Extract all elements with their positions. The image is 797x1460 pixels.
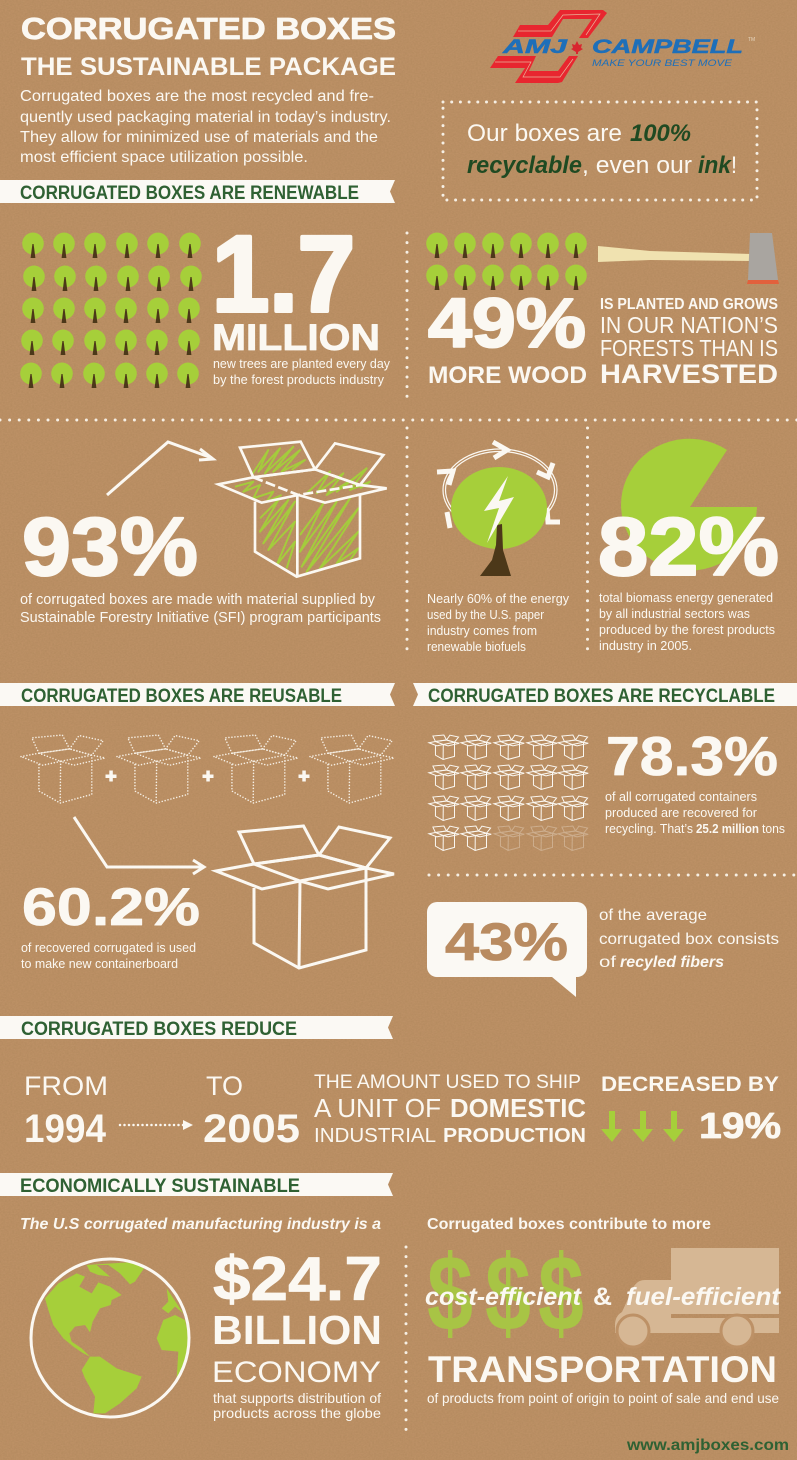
text: biofuels: renewable biofuels: [427, 640, 526, 654]
stat: 60.2%: 60.2%: [22, 878, 200, 937]
text: recycled fibers: of: [599, 954, 617, 971]
stat: 82%: produced by the forest products: [599, 623, 775, 637]
stat: 82%: total biomass energy generated: [599, 591, 773, 605]
title: [21, 11, 396, 81]
stat: 93%: 93%: [22, 500, 198, 593]
timeline: from 1994 to 2005: [24, 1071, 300, 1151]
stat: 78.3%: produced are recovered for: [605, 806, 757, 820]
icon: tree with energy cycle: [437, 442, 560, 576]
callout: 100% recyclable: 100%: [630, 120, 691, 147]
callout: 100% recyclable: Our boxes are: [467, 120, 622, 147]
callout: 100% recyclable: !: [731, 152, 737, 179]
banner: reduce: CORRUGATED BOXES REDUCE: [21, 1019, 297, 1040]
subheading: economy: The U.S corrugated manufacturing industry is a: [20, 1216, 381, 1233]
text: recycled fibers: [599, 907, 779, 971]
icon: dollar signs: $: [427, 1232, 473, 1353]
stat: cost-efficient and fuel-efficient transportation: &: [593, 1283, 612, 1311]
text: recycled fibers: corrugated box consists: [599, 931, 779, 948]
icon grid: 30 trees: [20, 232, 202, 388]
callout: 100% recyclable: recyclable: [467, 152, 582, 179]
stat: 82%: 82%: [598, 500, 779, 593]
statement: amount used to ship: PRODUCTION: [443, 1125, 586, 1147]
stat: 49% more wood: MORE WOOD: [428, 362, 587, 389]
website URL: www.amjboxes.com: [626, 1437, 789, 1454]
stat: $24.7 billion economy: that supports distribution of: [213, 1390, 381, 1406]
title: CORRUGATED BOXES: [21, 11, 396, 46]
stat: 1.7 million trees: new trees are planted every day: [213, 357, 391, 371]
icon: dollar signs: $: [485, 1232, 531, 1353]
stat: decreased by 19%: [601, 1073, 781, 1146]
timeline: from 1994 to 2005: 2005: [203, 1107, 300, 1151]
icon grid: 12 trees: [426, 232, 587, 290]
timeline: from 1994 to 2005: TO: [206, 1071, 243, 1101]
pie chart: 82%: [621, 439, 757, 571]
intro paragraph: quently used packaging material in today’s industry.: [20, 109, 391, 126]
stat: 60.2%: [21, 878, 200, 971]
logo: AMJ Campbell: MAKE YOUR BEST MOVE: [592, 58, 733, 69]
banner: renewable: CORRUGATED BOXES ARE RENEWABLE: [20, 183, 359, 204]
stat: 1.7 million trees: MILLION: [212, 317, 380, 358]
stat: cost-efficient and fuel-efficient transportation: fuel-efficient: [626, 1283, 782, 1311]
banner: reusable: CORRUGATED BOXES ARE REUSABLE: [21, 686, 342, 707]
icon: dollar signs: $: [538, 1232, 584, 1353]
statement: amount used to ship: DOMESTIC: [450, 1093, 586, 1123]
statement: amount used to ship: A UNIT OF: [314, 1093, 441, 1123]
callout: 100% recyclable: , even our: [582, 152, 692, 179]
icons: four dotted boxes with plus signs: [21, 735, 394, 803]
text: biofuels: Nearly 60% of the energy: [427, 592, 570, 606]
text: biofuels: industry comes from: [427, 624, 537, 638]
stat: decreased by 19%: 19%: [699, 1105, 781, 1146]
logo: AMJ Campbell: AMJ: [501, 37, 568, 58]
icon: axe: [598, 233, 779, 284]
stat: $24.7 billion economy: BILLION: [212, 1307, 382, 1353]
timeline: from 1994 to 2005: 1994: [24, 1107, 107, 1151]
stat: $24.7 billion economy: [212, 1245, 382, 1421]
stat: 1.7 million trees: by the forest products industry: [213, 373, 385, 387]
text: biofuels: [427, 592, 570, 654]
arrow: to shaded box: [107, 442, 213, 495]
text: recycled fibers: recyled fibers: [620, 954, 724, 971]
speech bubble: 43%: 43%: [445, 913, 568, 972]
stat: cost-efficient and fuel-efficient transportation: cost-efficient: [425, 1283, 583, 1311]
statement: amount used to ship: INDUSTRIAL: [314, 1125, 436, 1147]
intro paragraph: most efficient space utilization possible.: [20, 149, 308, 166]
intro paragraph: [20, 88, 391, 166]
stat: 93%: [20, 500, 381, 626]
icon: box with green scribble: [218, 442, 387, 577]
stat: 93%: Sustainable Forestry Initiative (SFI) program participants: [20, 609, 381, 626]
banner: economically sustainable: ECONOMICALLY SUSTAINABLE: [20, 1176, 300, 1197]
icon grid: 20 small boxes: [429, 735, 588, 850]
icon: dollar signs: [427, 1232, 584, 1353]
statement: amount used to ship: THE AMOUNT USED TO SHIP: [314, 1072, 581, 1093]
icon: truck: [615, 1248, 779, 1347]
stat: 49% more wood: 49%: [428, 284, 586, 362]
subheading: transportation: Corrugated boxes contribute to more: [427, 1216, 711, 1233]
banner: reduce: [0, 1016, 393, 1040]
stat: decreased by 19%: DECREASED BY: [601, 1073, 779, 1096]
callout: 100% recyclable: ink: [698, 152, 733, 179]
stat: $24.7 billion economy: $24.7: [213, 1245, 382, 1314]
stat: 49% more wood: IN OUR NATION’S: [600, 312, 778, 338]
stat: 49% more wood: [428, 284, 778, 389]
banner: economically sustainable: [0, 1173, 393, 1197]
stat: cost-efficient and fuel-efficient transportation: [425, 1283, 782, 1406]
title: THE SUSTAINABLE PACKAGE: [21, 53, 396, 81]
stat: cost-efficient and fuel-efficient transportation: TRANSPORTATION: [428, 1349, 777, 1390]
stat: 60.2%: to make new containerboard: [21, 957, 178, 971]
stat: 82%: industry in 2005.: [599, 639, 692, 653]
stat: 78.3%: [605, 725, 785, 836]
stat: cost-efficient and fuel-efficient transportation: of products from point of origin to point of sale and end use: [427, 1390, 779, 1406]
stat: $24.7 billion economy: products across the globe: [213, 1405, 381, 1421]
stat: 78.3%: 25.2 million: [696, 822, 759, 836]
logo: AMJ Campbell: [490, 10, 755, 83]
intro paragraph: Corrugated boxes are the most recycled and fre-: [20, 88, 374, 105]
text: recycled fibers: of the average: [599, 907, 707, 924]
text: biofuels: used by the U.S. paper: [427, 608, 544, 622]
stat: 78.3%: 78.3%: [606, 725, 778, 787]
callout: 100% recyclable: [443, 102, 757, 200]
stat: 1.7 million trees: 1.7: [212, 213, 355, 334]
stat: $24.7 billion economy: ECONOMY: [212, 1356, 381, 1389]
icon: large box: [216, 826, 394, 968]
stat: 78.3%: of all corrugated containers: [605, 790, 757, 804]
speech bubble: 43%: [427, 902, 587, 997]
stat: 82%: [598, 500, 779, 653]
stat: 93%: of corrugated boxes are made with material supplied by: [20, 591, 375, 608]
intro paragraph: They allow for minimized use of materials and the: [20, 129, 378, 146]
stat: 1.7 million trees: [212, 213, 391, 387]
stat: 78.3%: recycling. That’s: [605, 822, 693, 836]
arrow: to large box: [74, 817, 204, 874]
stat: 60.2%: of recovered corrugated is used: [21, 941, 196, 955]
stat: 49% more wood: IS PLANTED AND GROWS: [600, 296, 778, 313]
icon: globe: [31, 1259, 189, 1417]
logo: AMJ Campbell: TM: [748, 37, 755, 43]
stat: 78.3%: tons: [762, 822, 785, 836]
stat: 82%: by all industrial sectors was: [599, 607, 750, 621]
timeline: from 1994 to 2005: FROM: [24, 1071, 108, 1101]
logo: AMJ Campbell: CAMPBELL: [592, 37, 743, 58]
statement: amount used to ship: [314, 1072, 586, 1147]
stat: 49% more wood: HARVESTED: [600, 359, 778, 389]
